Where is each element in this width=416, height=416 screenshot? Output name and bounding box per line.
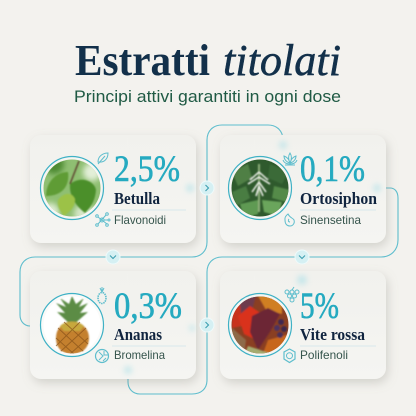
arrow node: Betulla to Ortosiphon xyxy=(200,181,214,195)
name: Ananas xyxy=(114,325,163,344)
panel: Betulla xyxy=(30,135,196,243)
title: Estratti xyxy=(75,36,210,85)
photo: pineapple xyxy=(40,294,104,356)
icon: polyphenol ring xyxy=(284,349,295,362)
active compound: Bromelina xyxy=(114,348,165,362)
active compound: Flavonoidi xyxy=(114,213,166,227)
arrow node: Ortosiphon to Vite rossa xyxy=(295,250,309,264)
icon: grapes xyxy=(285,287,299,302)
icon: enzyme xyxy=(96,350,108,362)
icon: molecule xyxy=(96,213,110,226)
arrow node: Betulla to Ananas xyxy=(106,250,120,264)
title: titolati xyxy=(223,36,341,85)
photo: birch leaves xyxy=(40,154,104,224)
percentage: 2,5% xyxy=(114,149,180,190)
icon: leaf xyxy=(98,153,108,164)
icon: drop xyxy=(285,214,294,226)
percentage: 0,1% xyxy=(300,149,365,190)
connector line: Ortosiphon to Vite rossa xyxy=(128,188,398,394)
photo: orthosiphon plant xyxy=(228,156,292,220)
photo: red vine leaves xyxy=(228,294,292,356)
name: Ortosiphon xyxy=(300,189,377,208)
connector line: Ananas to Ortosiphon xyxy=(20,125,283,326)
active compound: Polifenoli xyxy=(300,348,348,362)
subtitle: Principi attivi garantiti in ogni dose xyxy=(74,88,341,106)
name: Vite rossa xyxy=(300,325,365,344)
active compound: Sinensetina xyxy=(300,213,361,227)
arrow node: Ananas to Vite rossa xyxy=(200,318,214,332)
percentage: 5% xyxy=(300,286,339,327)
panel: Ortosiphon xyxy=(220,135,386,243)
panel: Ananas xyxy=(30,271,196,379)
percentage: 0,3% xyxy=(114,286,182,327)
glow accents on connectors xyxy=(124,141,381,374)
icon: pineapple xyxy=(98,287,106,304)
icon: lotus xyxy=(283,153,297,165)
panel: Vite rossa xyxy=(220,271,386,379)
name: Betulla xyxy=(114,189,160,208)
